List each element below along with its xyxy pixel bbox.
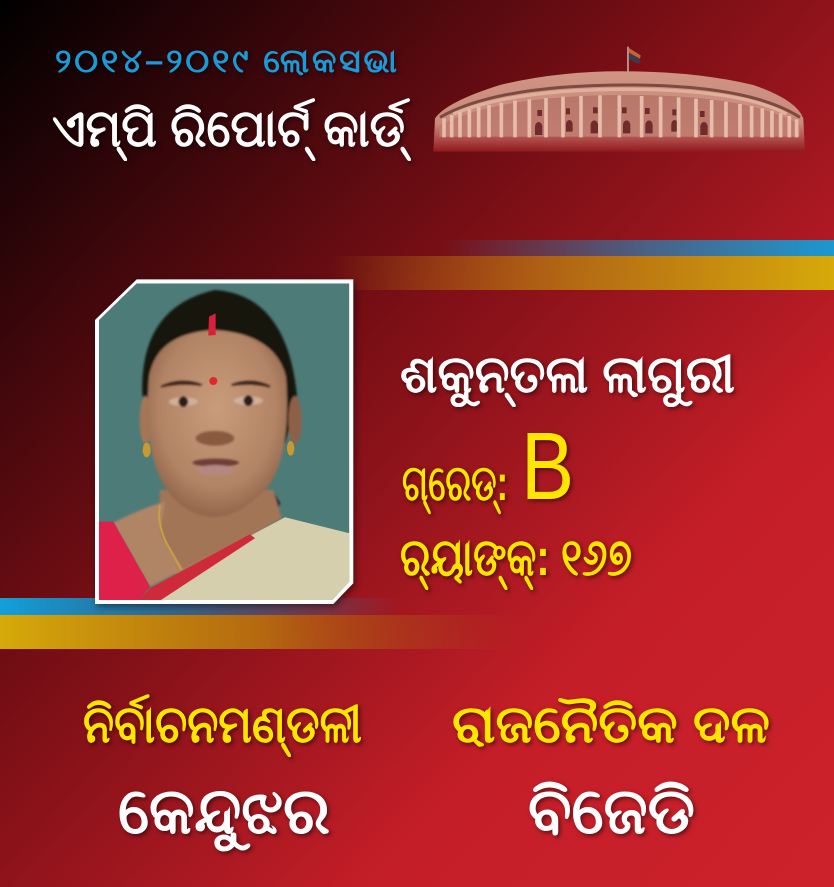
title: years and Lok Sabha: ୨୦୧୪–୨୦୧୯ ଲୋକସଭା bbox=[55, 42, 397, 79]
party heading: ରାଜନୈତିକ ଦଳ bbox=[452, 696, 770, 754]
party value: ବିଜେଡି bbox=[528, 775, 695, 847]
MP name: ଶକୁନ୍ତଳା ଲାଗୁରୀ bbox=[400, 346, 735, 407]
top colour bands bbox=[330, 240, 834, 290]
portrait photo bbox=[95, 279, 353, 604]
icon: parliament building bbox=[433, 47, 805, 152]
grade: B bbox=[521, 412, 574, 520]
lower colour bands bbox=[0, 598, 525, 649]
grade: ଗ୍ରେଡ୍: bbox=[402, 455, 508, 515]
constituency heading: ନିର୍ବାଚନମଣ୍ଡଳୀ bbox=[83, 694, 362, 757]
rank: ର‍୍ୟାଙ୍କ୍: ୧୬୭ bbox=[400, 529, 632, 590]
constituency value: କେନ୍ଦୁଝର bbox=[118, 775, 330, 852]
title: MP report card: ଏମ୍‌ପି ରିପୋର୍ଟ୍ କାର୍ଡ୍ bbox=[52, 98, 411, 161]
grade bbox=[402, 412, 574, 520]
